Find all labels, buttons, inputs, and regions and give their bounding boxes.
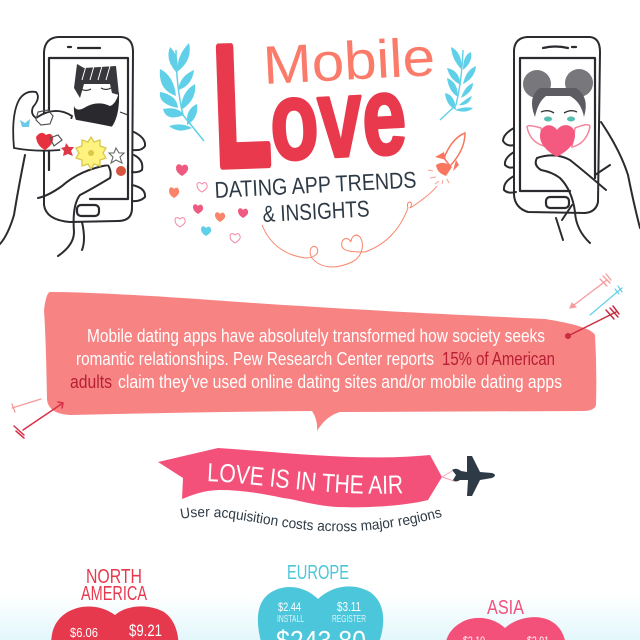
illustration: right phone with girl and winged heart (503, 37, 640, 243)
values: $6.06 (70, 625, 98, 640)
title word: Love: L (211, 9, 273, 203)
panel: asia (444, 597, 567, 640)
region heading: NORTH (86, 566, 142, 588)
illustration: left phone with tattooed man (0, 37, 145, 256)
decoration: small hearts (169, 164, 248, 243)
icon: arrows top right (565, 274, 622, 339)
intro text (70, 326, 562, 392)
region heading: AMERICA (81, 583, 147, 605)
panel: north america (51, 566, 179, 640)
intro text: adults (70, 372, 112, 392)
intro text: romantic relationships. Pew Research Center reports (76, 349, 434, 369)
region heading: ASIA (487, 597, 525, 619)
values (276, 599, 366, 640)
decoration: right laurel (440, 47, 476, 120)
winged heart (527, 125, 590, 157)
values: REGISTER (332, 614, 366, 625)
panel: speech bubble intro (44, 292, 596, 431)
subheading: User acquisition costs across major regions (180, 508, 442, 532)
values: $2.44 (278, 600, 301, 614)
panel: north america: $9.21 (129, 621, 162, 640)
girl hair and face (523, 69, 593, 122)
icon: arrows bottom left (12, 399, 63, 438)
tattooed arm (13, 92, 127, 176)
title word: Love (211, 9, 409, 203)
banner: love is in the air (158, 448, 454, 508)
decoration: left laurel (160, 43, 204, 141)
intro text: Mobile dating apps have absolutely transformed how society seeks (87, 326, 545, 346)
subtitle line two: & INSIGHTS (262, 195, 370, 227)
banner text: LOVE IS IN THE AIR (208, 463, 402, 494)
title word: Mobile: Mobile (261, 27, 436, 96)
title (211, 9, 436, 227)
values: $3.11 (337, 599, 361, 614)
icon: airplane (452, 456, 495, 496)
values: INSTALL (277, 614, 304, 625)
intro text: claim they've used online dating sites and/or mobile dating apps (118, 372, 562, 392)
region heading (81, 566, 147, 605)
subtitle line one: DATING APP TRENDS (214, 166, 417, 203)
title word: Love: ove (267, 52, 409, 184)
bearded man (60, 64, 128, 134)
intro text: 15% of American (442, 349, 555, 369)
icon: rocket with looping trail (262, 133, 465, 267)
region heading: EUROPE (287, 562, 349, 584)
panel: europe (258, 562, 383, 640)
